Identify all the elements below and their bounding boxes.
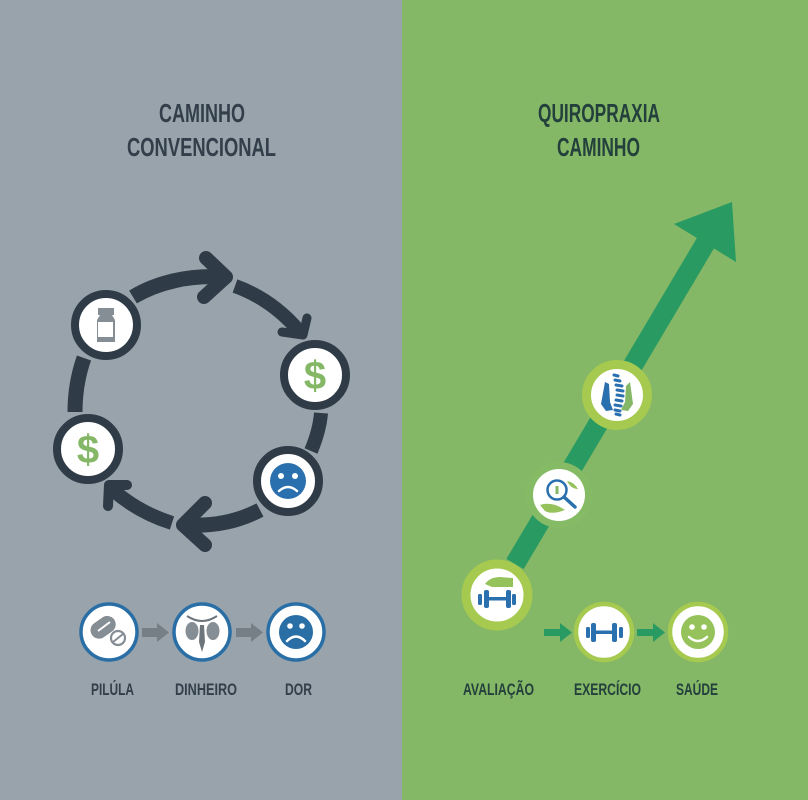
heading: conventional path xyxy=(127,98,276,162)
arrow: exercise to health xyxy=(637,623,665,642)
arrow: right dollar to sad face xyxy=(311,413,321,451)
arrow: sad face to bottom xyxy=(183,503,260,545)
heading: conventional path: CAMINHO xyxy=(159,98,245,128)
labels: conventional steps: DINHEIRO xyxy=(175,681,237,699)
arrow: pill to money xyxy=(142,623,169,642)
labels: chiropractic steps: EXERCÍCIO xyxy=(574,680,641,699)
icon: sad face node xyxy=(257,450,319,512)
labels: chiropractic steps: AVALIAÇÃO xyxy=(463,679,534,699)
icon: health smiley xyxy=(670,604,726,660)
heading: chiropractic path: QUIROPRAXIA xyxy=(538,98,660,128)
arrow: rising progress line xyxy=(515,202,736,564)
icon: dollar node right: $ xyxy=(304,354,326,398)
heading: conventional path: CONVENCIONAL xyxy=(127,132,276,162)
icon: pill xyxy=(81,604,137,660)
heading: chiropractic path: CAMINHO xyxy=(557,132,640,162)
arrow: money to pain xyxy=(236,623,263,642)
labels: conventional steps: DOR xyxy=(285,681,312,699)
heading: chiropractic path xyxy=(538,98,660,162)
arrow: bottle to dollar xyxy=(133,258,226,297)
icon: exercise dumbbell xyxy=(576,604,632,660)
labels: chiropractic steps xyxy=(463,679,718,699)
arrow: top to right dollar xyxy=(235,286,307,335)
panel: chiropractic path background xyxy=(402,0,808,800)
icon: examination magnifier and hands xyxy=(526,462,592,528)
icon: spine and hands xyxy=(586,364,648,426)
arrow: bottom to left dollar xyxy=(108,485,172,523)
labels: chiropractic steps: SAÚDE xyxy=(676,680,718,699)
labels: conventional steps xyxy=(91,680,312,699)
icon: assessment hand and dumbbell xyxy=(466,564,528,626)
icon: dollar node right xyxy=(284,344,346,406)
arrow: left dollar to bottle xyxy=(75,358,84,412)
labels: conventional steps: PILÚLA xyxy=(91,680,134,699)
icon: pain face xyxy=(268,604,324,660)
icon: dollar node left xyxy=(57,418,119,480)
panel: conventional path background xyxy=(0,0,402,800)
icon: medicine bottle node xyxy=(75,294,137,356)
icon: dollar node left: $ xyxy=(77,428,99,472)
icon: money / organ symbol xyxy=(174,604,230,660)
cycle diagram xyxy=(57,258,346,545)
arrow: assessment to exercise xyxy=(544,623,572,642)
